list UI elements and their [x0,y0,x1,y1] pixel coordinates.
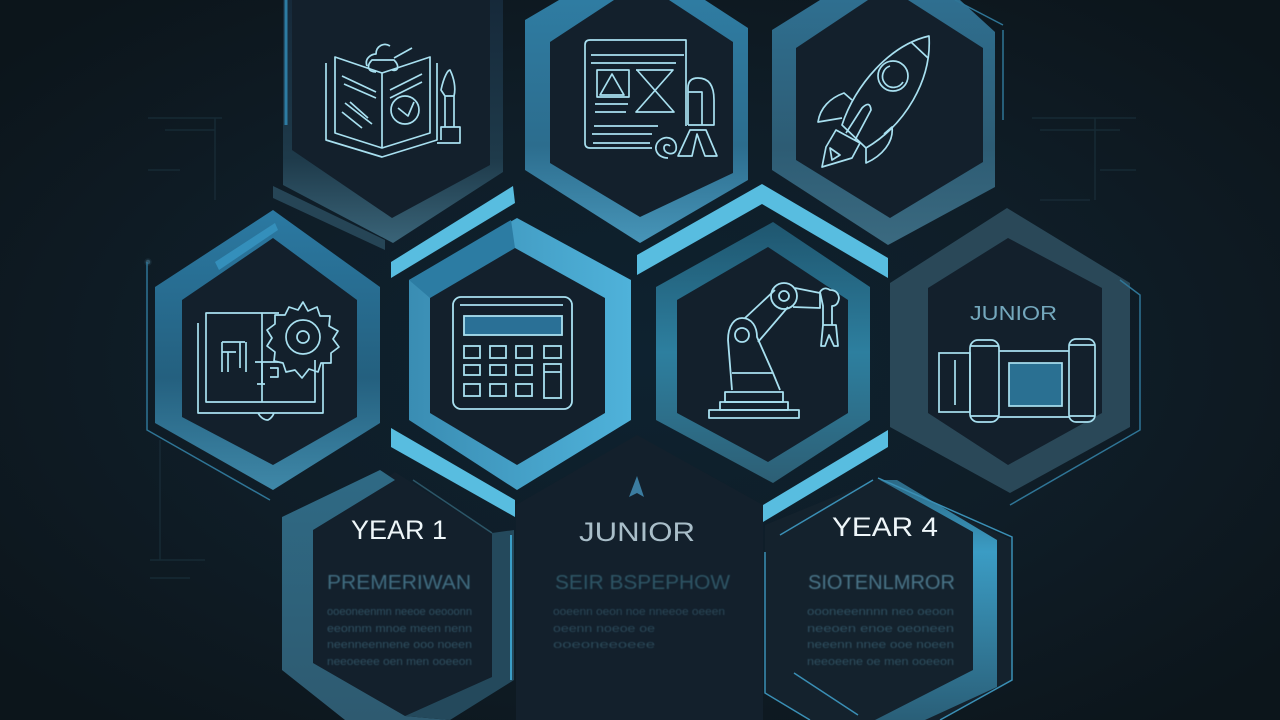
panel: year 4 senior [765,478,1012,720]
hexagon: top right rocket [772,0,1003,245]
icon: arrow [629,476,644,497]
thin outline [1010,280,1140,505]
heading: junior: JUNIOR [579,517,695,547]
subheading: PREMERIWAN [327,572,471,594]
body text [553,606,725,651]
icon: calculator [453,297,572,409]
highlight [215,223,278,270]
body text: eeonnm mnoe meen nenn [327,623,472,635]
body text: oooneeennnn neo oeoon [807,606,954,618]
icon: rocket [818,36,929,167]
body text: ooeoneenmn neeoe oeooonn [327,606,472,618]
subheading: SEIR BSPEPHOW [555,572,730,594]
lower ring band [273,186,385,250]
heading: year 4: YEAR 4 [832,512,938,542]
hexagon: middle left book and gear [147,210,380,500]
icon: open book [326,44,460,157]
body text: oeenn noeoe oe [553,623,655,635]
ring [282,470,450,720]
panel: junior center [516,435,763,720]
body text [807,606,954,668]
hexagon: top left book [273,0,503,250]
icon: robot arm [709,283,839,418]
hexagon: middle calculator [391,186,631,517]
hexagon: middle robot arm [637,184,888,522]
label: junior: JUNIOR [970,303,1057,325]
body text: neeoen enoe oeoneen [807,623,954,635]
subheading: SIOTENLMROR [808,572,955,594]
body text: neeoeeee oen men ooeeon [327,656,472,668]
body text: ooeenn oeon noe nneeoe oeeen [553,606,725,618]
hexagon: top center document [525,0,748,243]
bright right accent [510,535,512,680]
body text [327,606,472,668]
hexagon: middle right machine [890,208,1140,505]
right decorative circuit lines [1032,118,1136,200]
icon: book with gear [198,302,339,420]
thin outline [955,0,1003,120]
body text: ooeoneeoeee [553,639,655,651]
body text: neenneennene ooo noeen [327,639,472,651]
thin edge line [413,480,492,533]
darker top left ring [409,220,515,298]
bright left edge [284,0,288,125]
icon: document with diagrams [585,40,717,158]
bright chevron bottom left [391,428,515,517]
panel: year 1 freshman [282,470,514,720]
icon: machine [939,339,1095,422]
thin outline [147,262,270,500]
bright chevron top [637,184,888,278]
body text: neeenn nnee ooe noeen [807,639,954,651]
body text: neeoeene oe men ooeeon [807,656,954,668]
heading: year 1: YEAR 1 [351,515,447,545]
ring band [875,480,997,720]
left decorative circuit lines [145,118,222,578]
thin outlines [765,478,1012,720]
bright chevron bottom [763,430,888,522]
bright chevron top left [391,186,515,278]
